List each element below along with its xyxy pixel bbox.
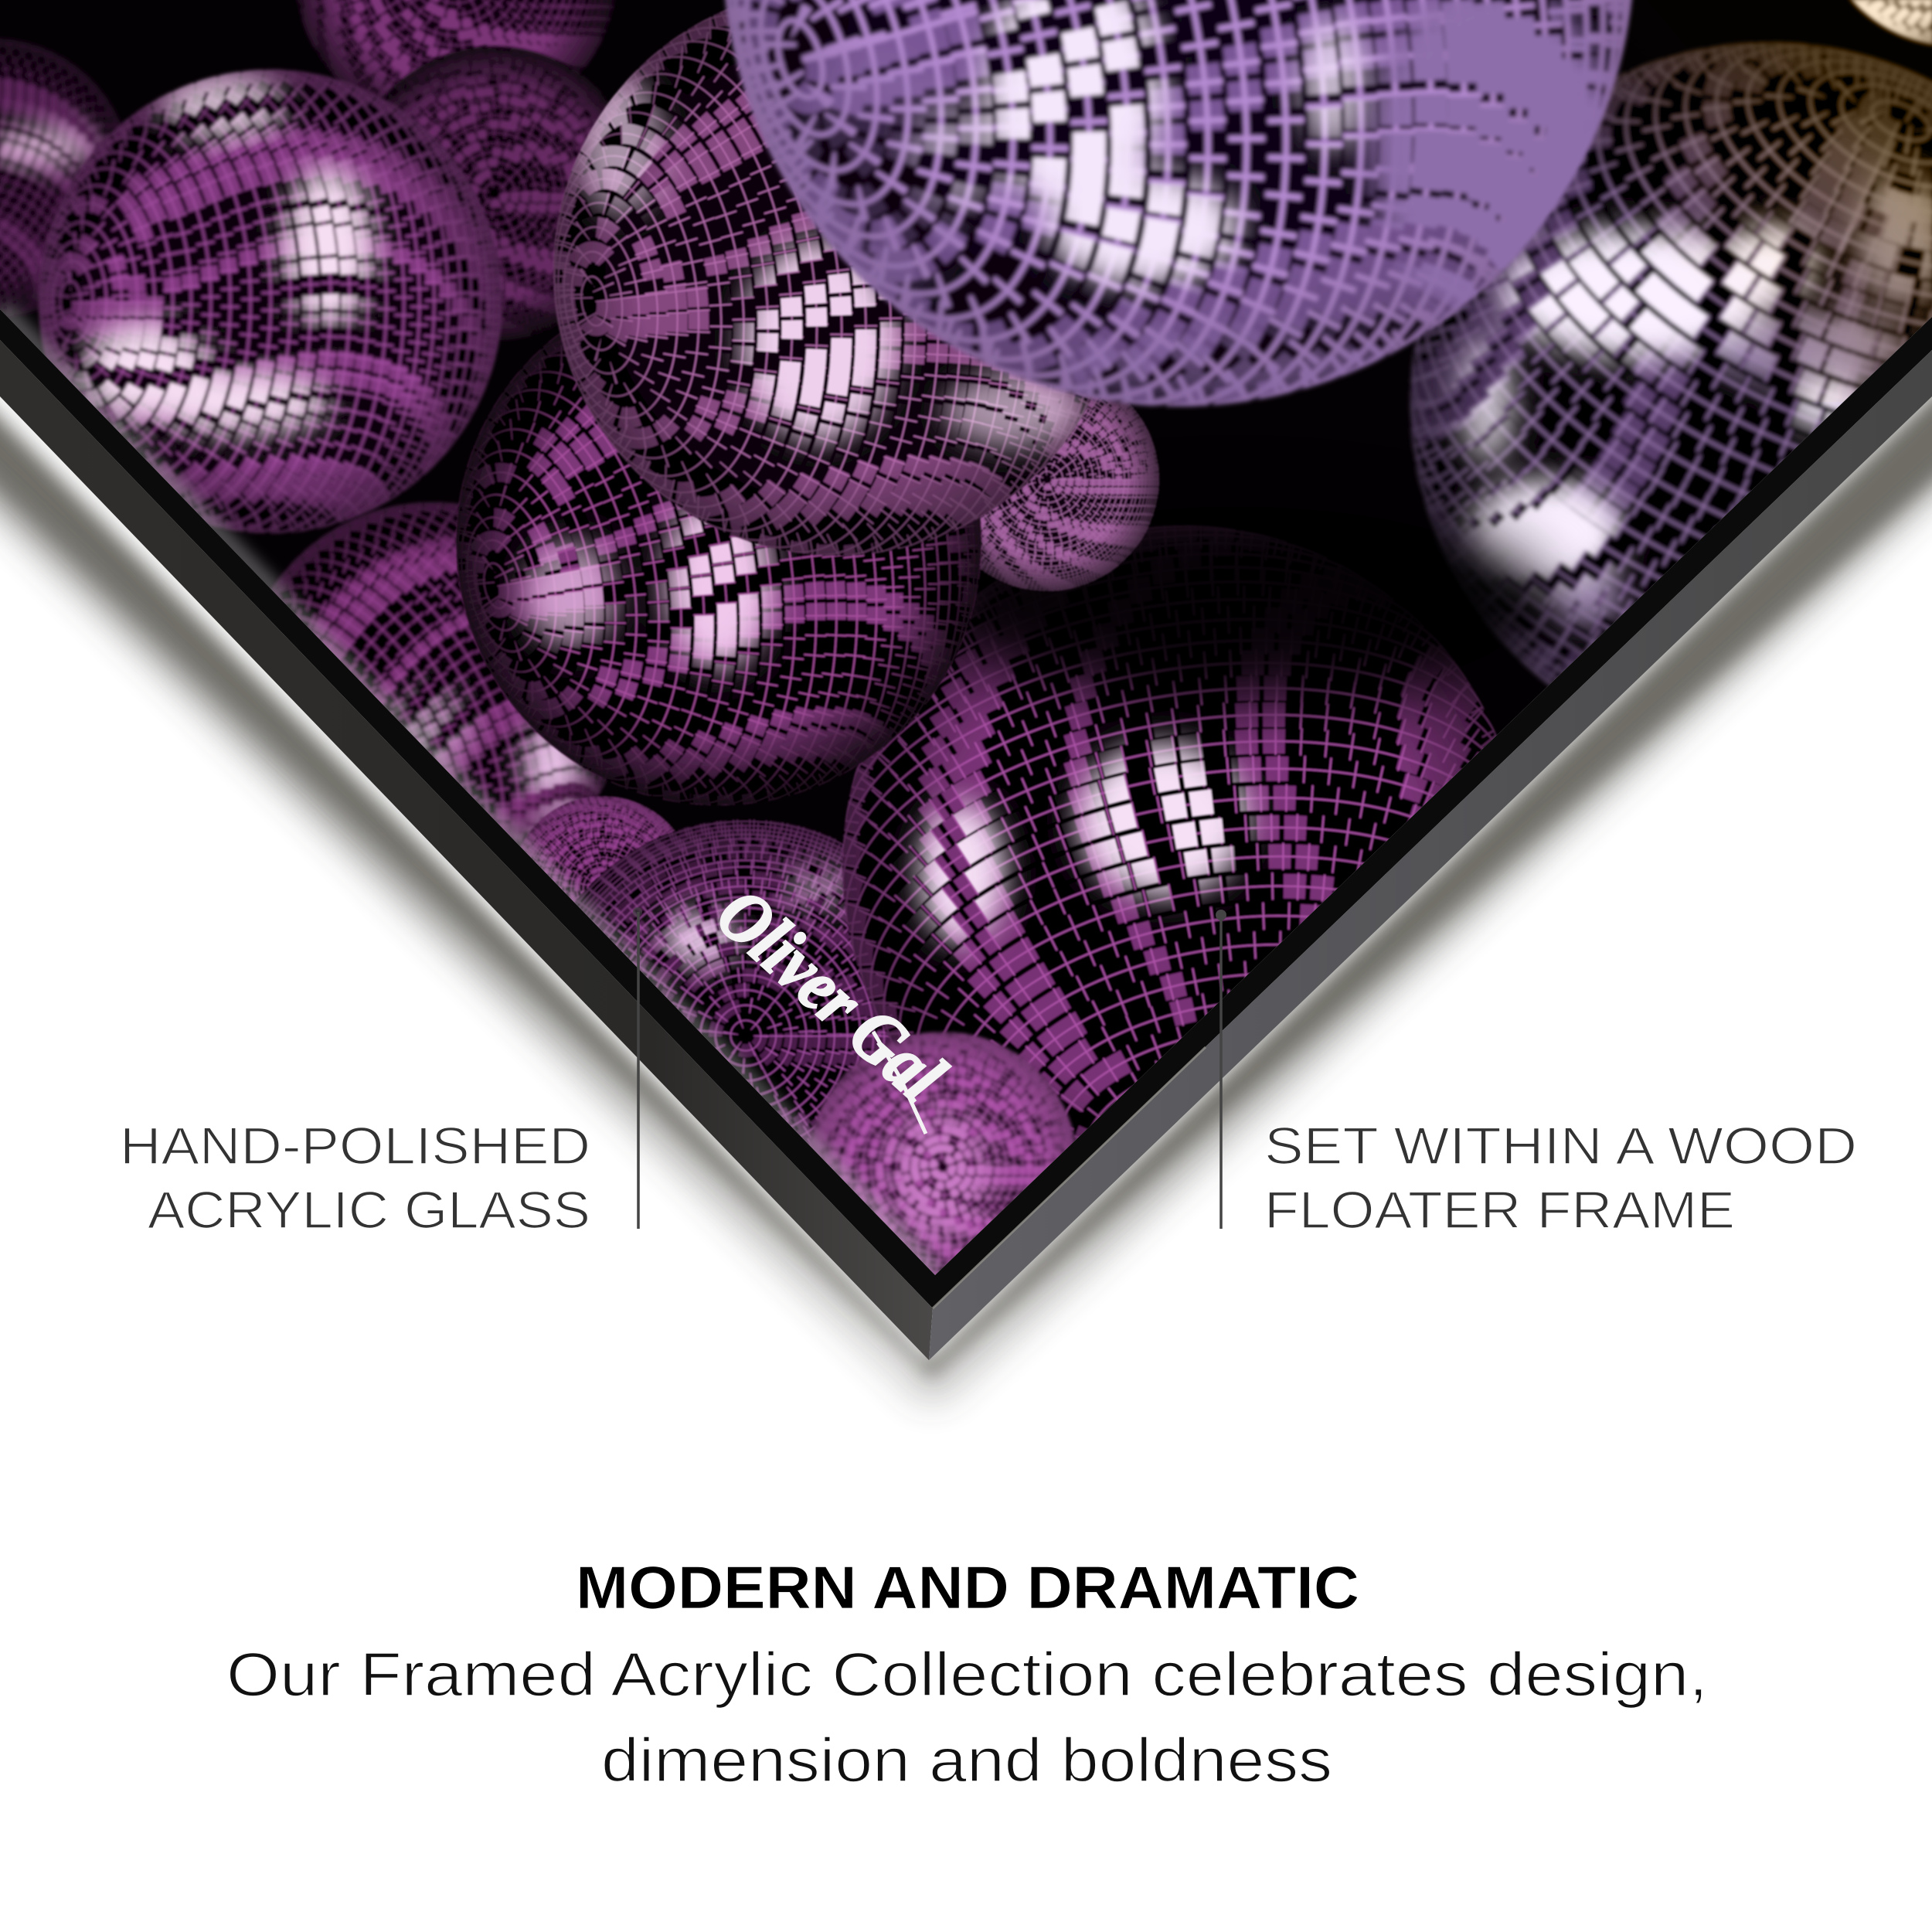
disco ball: left [39,70,502,533]
artist signature: Oliver Gal [702,872,961,1117]
disco ball: top left [0,0,182,368]
label: floater frame: SET WITHIN A WOOD [1264,1117,1857,1175]
disco ball: centre left [410,234,1027,851]
disco ball: top centre-left [294,0,618,131]
cast shadow under frame [0,325,1932,1397]
disco ball: near left frame [510,796,696,981]
heading: MODERN AND DRAMATIC [576,1553,1359,1621]
label: acrylic glass: ACRYLIC GLASS [148,1181,590,1240]
artwork: disco balls [0,0,1932,1314]
frame: right side face [929,350,1932,1360]
disco ball: near frame tip [808,1032,1078,1302]
disco ball: lower left small [168,431,697,960]
label: floater frame: FLOATER FRAME [1264,1181,1735,1240]
disco ball: upper centre [521,0,1155,588]
description [226,1640,1708,1794]
disco ball: under upper centre [935,367,1159,591]
leader line: floater frame [1216,910,1226,1229]
description: Our Framed Acrylic Collection celebrates design, [226,1640,1708,1709]
disco ball: bottom with signature [529,819,962,1252]
label: acrylic glass: HAND-POLISHED [120,1117,590,1175]
label: acrylic glass [120,1117,590,1240]
disco ball: lower centre [788,471,1577,1260]
tan colour cast: top right [1546,0,1932,402]
shadowed top of lower centre ball [927,502,1546,703]
disco ball: top right tan [1777,0,1932,86]
frame: edge highlight [933,1047,1206,1308]
disco ball: right [1292,0,1932,879]
frame: left side face [0,340,933,1360]
label: floater frame [1264,1117,1857,1240]
disco ball: behind upper left [348,46,641,340]
disco ball: large top [614,0,1743,515]
leader line: acrylic glass [633,907,642,1229]
glass edge reflection [0,309,935,1275]
frame: black inner band [0,309,1932,1308]
description: dimension and boldness [601,1726,1332,1794]
